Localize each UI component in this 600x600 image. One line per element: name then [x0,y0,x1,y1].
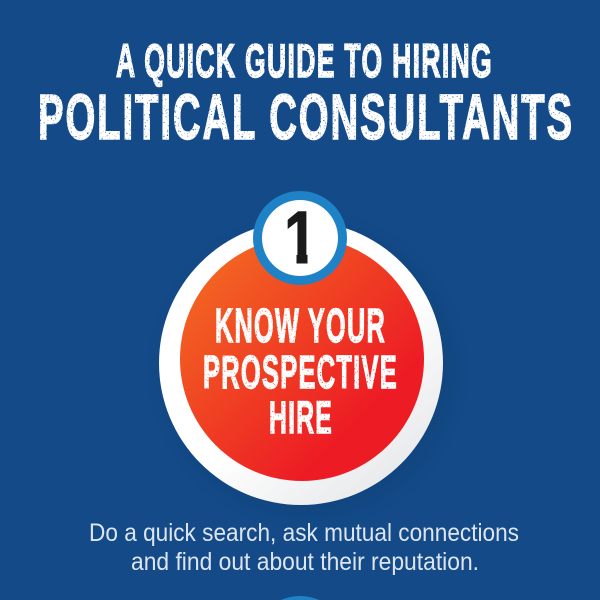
step 1 medallion [159,191,450,512]
number badge [253,191,347,285]
step heading: HIRE [269,392,333,443]
step heading: PROSPECTIVE [203,346,398,398]
number badge: 1 [284,196,317,279]
step heading: KNOW YOUR [215,300,386,353]
description text: and find out about their reputation. [131,548,479,576]
medallion shadow [166,228,450,512]
title [38,34,574,153]
step heading [203,300,398,443]
description text: Do a quick search, ask mutual connections [89,519,519,547]
description text [89,519,519,576]
red circle [180,237,424,481]
next step badge top [281,596,319,600]
white ring [159,221,443,505]
